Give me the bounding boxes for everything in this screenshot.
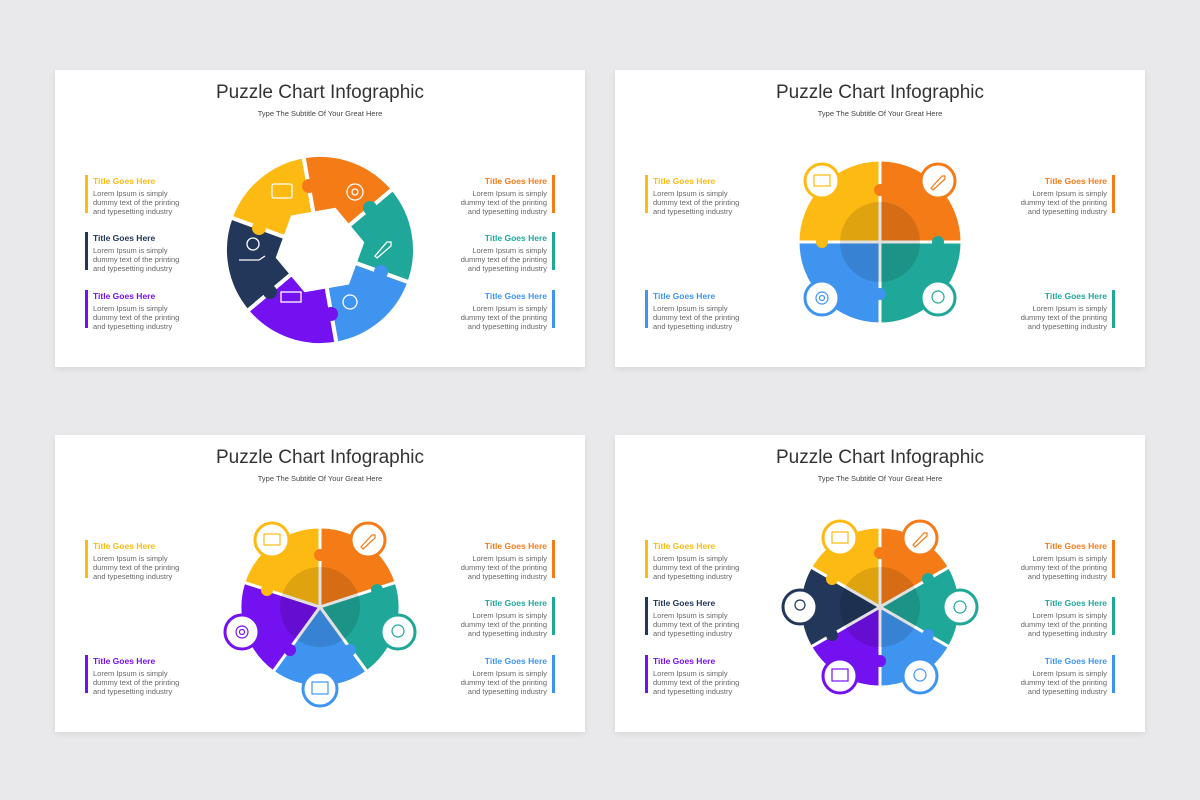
text block: purple	[85, 655, 187, 693]
text block: orange: Title Goes Here	[485, 541, 547, 551]
text block: orange: Title Goes Here	[1045, 176, 1107, 186]
text block: blue	[453, 655, 555, 693]
text block: teal	[453, 232, 555, 270]
text block: orange: and typesetting industry	[1028, 207, 1107, 216]
text block: teal: and typesetting industry	[1028, 322, 1107, 331]
text block: purple: dummy text of the printing	[653, 678, 739, 687]
panel: top-left pinwheel puzzle	[55, 70, 585, 367]
text block: orange: Title Goes Here	[1045, 541, 1107, 551]
text block: teal: Lorem Ipsum is simply	[472, 611, 547, 620]
title: Puzzle Chart Infographic	[216, 447, 424, 468]
title: Puzzle Chart Infographic	[776, 82, 984, 103]
text block: yellow	[85, 175, 187, 213]
text block: orange	[453, 540, 555, 578]
text block: orange	[1013, 540, 1115, 578]
text block: orange: and typesetting industry	[468, 572, 547, 581]
text block: purple: dummy text of the printing	[93, 313, 179, 322]
text block: teal	[1013, 597, 1115, 635]
text block: orange: and typesetting industry	[1028, 572, 1107, 581]
title: Puzzle Chart Infographic	[776, 447, 984, 468]
text block: orange	[1013, 175, 1115, 213]
subtitle: Type The Subtitle Of Your Great Here	[818, 474, 942, 483]
text block: navy: dummy text of the printing	[93, 255, 179, 264]
subtitle: Type The Subtitle Of Your Great Here	[258, 474, 382, 483]
text block: yellow: and typesetting industry	[93, 572, 172, 581]
text block: yellow: Title Goes Here	[653, 176, 715, 186]
subtitle: Type The Subtitle Of Your Great Here	[818, 109, 942, 118]
text block: yellow	[645, 540, 747, 578]
text block: teal: and typesetting industry	[468, 629, 547, 638]
text block: yellow: Title Goes Here	[93, 541, 155, 551]
text block: blue: and typesetting industry	[468, 322, 547, 331]
text block: blue: Title Goes Here	[653, 291, 715, 301]
text block: purple: and typesetting industry	[93, 322, 172, 331]
text block: yellow: Title Goes Here	[93, 176, 155, 186]
text block: purple: Lorem Ipsum is simply	[93, 669, 168, 678]
text block: yellow: Lorem Ipsum is simply	[653, 189, 728, 198]
text block: teal: dummy text of the printing	[1021, 313, 1107, 322]
text block: navy	[645, 597, 747, 635]
text block: blue: Lorem Ipsum is simply	[472, 669, 547, 678]
text block: teal: Lorem Ipsum is simply	[1032, 304, 1107, 313]
text block: yellow	[85, 540, 187, 578]
text block: purple: Title Goes Here	[93, 291, 155, 301]
text block: blue: and typesetting industry	[653, 322, 732, 331]
text block: orange: dummy text of the printing	[461, 563, 547, 572]
text block: purple: dummy text of the printing	[93, 678, 179, 687]
text block: blue: and typesetting industry	[468, 687, 547, 696]
text block: navy: and typesetting industry	[653, 629, 732, 638]
text block: blue: Title Goes Here	[485, 656, 547, 666]
text block: orange: Lorem Ipsum is simply	[1032, 554, 1107, 563]
text block: teal	[1013, 290, 1115, 328]
text block: teal: and typesetting industry	[468, 264, 547, 273]
text block: yellow: and typesetting industry	[653, 207, 732, 216]
text block: orange: Lorem Ipsum is simply	[1032, 189, 1107, 198]
text block: purple	[85, 290, 187, 328]
text block: orange	[453, 175, 555, 213]
text block: blue: Title Goes Here	[485, 291, 547, 301]
text block: navy: Lorem Ipsum is simply	[653, 611, 728, 620]
text block: purple: Lorem Ipsum is simply	[653, 669, 728, 678]
text block: blue	[645, 290, 747, 328]
chart: pinwheel puzzle	[226, 156, 414, 344]
text block: teal: and typesetting industry	[1028, 629, 1107, 638]
text block: teal: Lorem Ipsum is simply	[1032, 611, 1107, 620]
text block: orange: dummy text of the printing	[461, 198, 547, 207]
panel: bottom-right six-piece puzzle	[615, 435, 1145, 732]
text block: purple: Title Goes Here	[653, 656, 715, 666]
text block: yellow: Lorem Ipsum is simply	[93, 189, 168, 198]
text block: navy: Title Goes Here	[653, 598, 715, 608]
text block: teal: Title Goes Here	[1045, 291, 1107, 301]
text block: blue	[1013, 655, 1115, 693]
text block: teal: dummy text of the printing	[1021, 620, 1107, 629]
text block: orange: dummy text of the printing	[1021, 563, 1107, 572]
text block: blue: Title Goes Here	[1045, 656, 1107, 666]
text block: orange: dummy text of the printing	[1021, 198, 1107, 207]
text block: purple	[645, 655, 747, 693]
text block: navy	[85, 232, 187, 270]
chart: five-piece puzzle	[224, 522, 416, 708]
text block: purple: and typesetting industry	[653, 687, 732, 696]
text block: orange: Lorem Ipsum is simply	[472, 554, 547, 563]
text block: yellow: Lorem Ipsum is simply	[653, 554, 728, 563]
text block: orange: Lorem Ipsum is simply	[472, 189, 547, 198]
text block: blue: dummy text of the printing	[461, 313, 547, 322]
title: Puzzle Chart Infographic	[216, 82, 424, 103]
text block: purple: Lorem Ipsum is simply	[93, 304, 168, 313]
text block: teal	[453, 597, 555, 635]
text block: teal: Title Goes Here	[485, 598, 547, 608]
text block: teal: Lorem Ipsum is simply	[472, 246, 547, 255]
text block: blue: dummy text of the printing	[1021, 678, 1107, 687]
subtitle: Type The Subtitle Of Your Great Here	[258, 109, 382, 118]
text block: orange: Title Goes Here	[485, 176, 547, 186]
text block: blue: Lorem Ipsum is simply	[653, 304, 728, 313]
text block: teal: dummy text of the printing	[461, 255, 547, 264]
text block: purple: and typesetting industry	[93, 687, 172, 696]
text block: blue: dummy text of the printing	[653, 313, 739, 322]
chart: six-piece puzzle	[782, 520, 978, 694]
text block: yellow: dummy text of the printing	[653, 563, 739, 572]
text block: orange: and typesetting industry	[468, 207, 547, 216]
text block: teal: dummy text of the printing	[461, 620, 547, 629]
text block: purple: Title Goes Here	[93, 656, 155, 666]
text block: yellow: and typesetting industry	[93, 207, 172, 216]
chart: four-piece puzzle	[800, 162, 960, 322]
text block: blue: Lorem Ipsum is simply	[1032, 669, 1107, 678]
text block: blue: and typesetting industry	[1028, 687, 1107, 696]
text block: teal: Title Goes Here	[1045, 598, 1107, 608]
text block: navy: Title Goes Here	[93, 233, 155, 243]
text block: yellow	[645, 175, 747, 213]
text block: teal: Title Goes Here	[485, 233, 547, 243]
text block: yellow: Title Goes Here	[653, 541, 715, 551]
text block: yellow: and typesetting industry	[653, 572, 732, 581]
text block: yellow: Lorem Ipsum is simply	[93, 554, 168, 563]
panel: bottom-left five-piece puzzle	[55, 435, 585, 732]
text block: yellow: dummy text of the printing	[93, 198, 179, 207]
text block: navy: and typesetting industry	[93, 264, 172, 273]
text block: yellow: dummy text of the printing	[653, 198, 739, 207]
panel: top-right four-piece puzzle	[615, 70, 1145, 367]
text block: navy: Lorem Ipsum is simply	[93, 246, 168, 255]
text block: blue: dummy text of the printing	[461, 678, 547, 687]
text block: navy: dummy text of the printing	[653, 620, 739, 629]
text block: yellow: dummy text of the printing	[93, 563, 179, 572]
text block: blue: Lorem Ipsum is simply	[472, 304, 547, 313]
text block: blue	[453, 290, 555, 328]
